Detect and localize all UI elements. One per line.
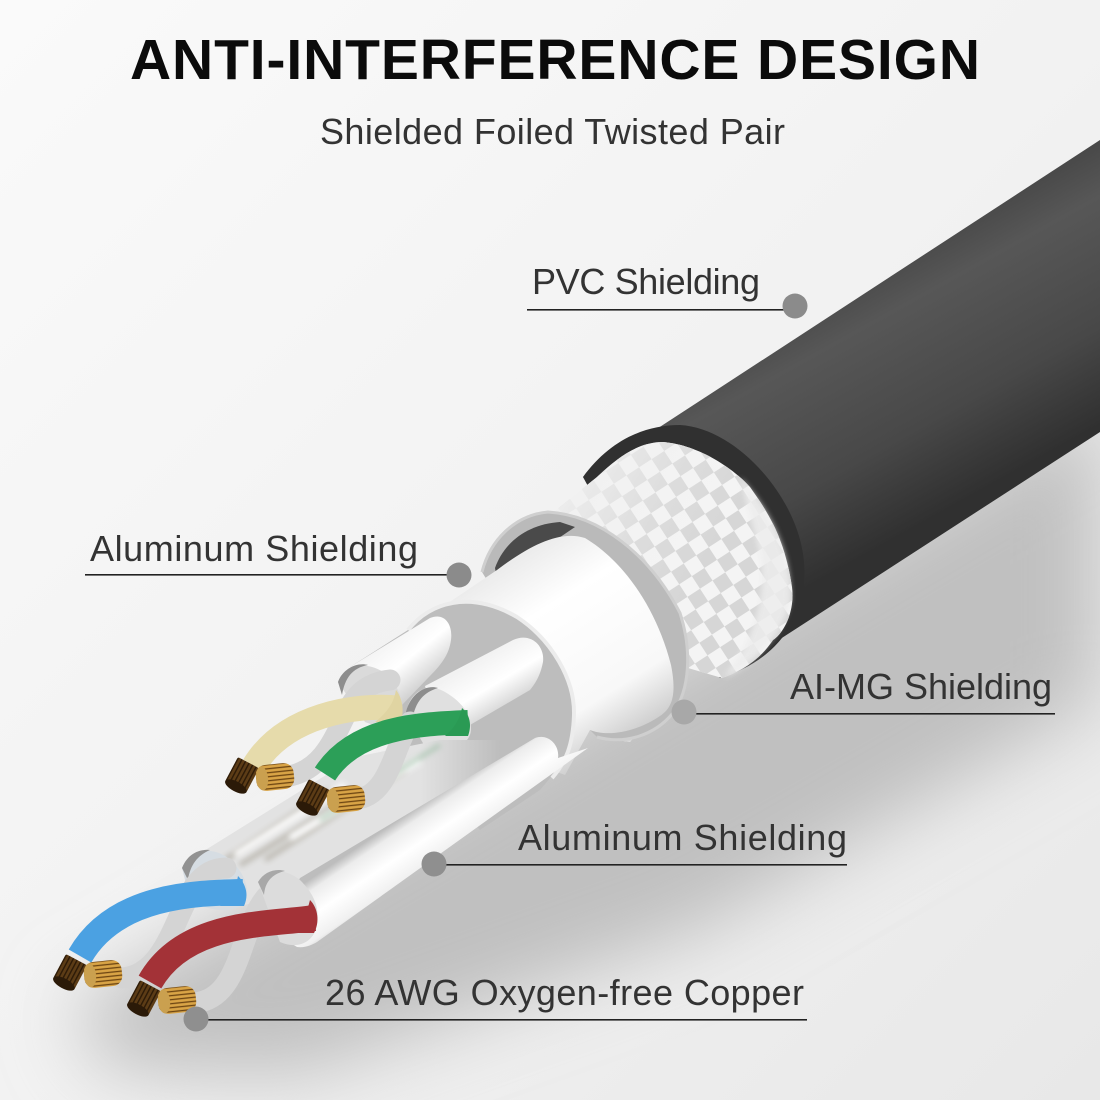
label: Aluminum Shielding (inner): Aluminum Shielding: [518, 817, 847, 858]
copper conductors: cream pair: [223, 757, 295, 797]
aluminum foil tube: [350, 536, 674, 830]
label: 26 AWG Oxygen-free Copper: [184, 972, 807, 1032]
red wire: [150, 900, 317, 982]
copper conductors: blue pair: [51, 954, 123, 994]
copper conductors: red pair: [125, 980, 197, 1020]
cream wire: [254, 690, 403, 766]
cable illustration: [51, 140, 1100, 1020]
label: 26 AWG Oxygen-free Copper: 26 AWG Oxygen-free Copper: [325, 972, 804, 1013]
label: Aluminum Shielding (outer): [85, 528, 472, 588]
braided Al-Mg shield: [482, 442, 793, 742]
label: Al-MG Shielding: [672, 666, 1055, 724]
title: ANTI-INTERFERENCE DESIGN: [130, 28, 980, 92]
blue wire: [80, 876, 246, 956]
label: Al-MG Shielding: AI-MG Shielding: [790, 666, 1052, 707]
label: Aluminum Shielding (inner): [422, 817, 847, 876]
label: PVC Shielding: PVC Shielding: [532, 261, 760, 302]
upper foil tubes: [338, 617, 543, 751]
label: Aluminum Shielding (outer): Aluminum Shielding: [90, 528, 418, 569]
subtitle: Shielded Foiled Twisted Pair: [320, 111, 785, 152]
lower translucent tube with reflections: [182, 740, 520, 910]
copper conductors: green pair: [294, 779, 366, 819]
green wire: [325, 708, 470, 774]
label: PVC Shielding: [527, 261, 808, 318]
black PVC jacket: [583, 140, 1100, 678]
front white foil tube: [258, 737, 588, 947]
twisted white wires: [122, 680, 410, 1002]
